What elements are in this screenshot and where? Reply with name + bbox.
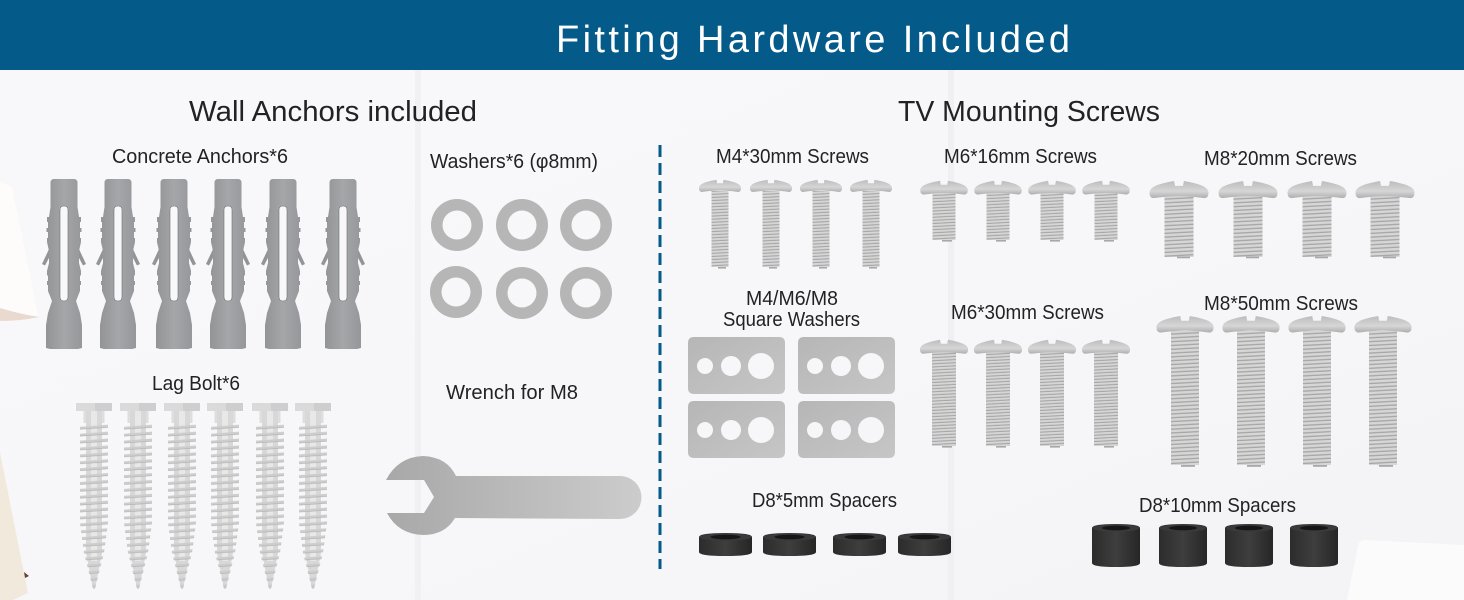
label: 5mm spacers: D8*5mm Spacers [752, 490, 897, 512]
M8 20mm screws [1150, 181, 1414, 258]
lag bolts [76, 403, 331, 593]
label: M6 30mm screws: M6*30mm Screws [951, 302, 1104, 324]
M4 30mm screws [699, 180, 892, 269]
label: M8 50mm screws: M8*50mm Screws [1204, 293, 1358, 315]
icon: wrench [386, 456, 642, 535]
M8 50mm screws [1156, 316, 1412, 467]
M6 30mm screws [920, 340, 1130, 448]
label: washers: Washers*6 (φ8mm) [430, 151, 598, 173]
title: Fitting Hardware Included [556, 19, 1070, 61]
square washers [688, 337, 895, 458]
header banner [0, 0, 1464, 70]
label: wrench: Wrench for M8 [446, 382, 578, 404]
lamp shade [0, 182, 39, 322]
round washers [430, 199, 612, 319]
M6 16mm screws [920, 181, 1130, 242]
label: lag bolts: Lag Bolt*6 [152, 373, 240, 395]
label: M4 30mm screws: M4*30mm Screws [716, 146, 869, 168]
heading: TV mounting screws: TV Mounting Screws [898, 96, 1160, 128]
heading: wall anchors: Wall Anchors included [189, 96, 477, 128]
label: square washers: Square Washers [723, 309, 860, 331]
label: concrete anchors: Concrete Anchors*6 [112, 146, 288, 168]
label: square washers [723, 288, 860, 331]
lamp wooden leg [0, 452, 29, 600]
5mm spacers [699, 533, 951, 556]
label: square washers: M4/M6/M8 [746, 288, 838, 310]
label: 10mm spacers: D8*10mm Spacers [1139, 495, 1296, 517]
label: M8 20mm screws: M8*20mm Screws [1204, 148, 1357, 170]
label: M6 16mm screws: M6*16mm Screws [944, 146, 1097, 168]
concrete anchors [42, 179, 365, 349]
10mm spacers [1092, 524, 1338, 567]
divider: dashed line [658, 145, 662, 569]
